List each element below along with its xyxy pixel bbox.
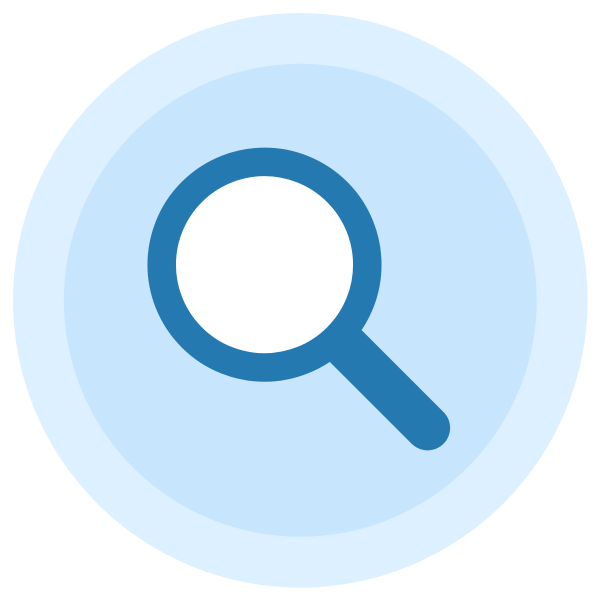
icon: magnifying glass xyxy=(162,162,428,428)
inner circle xyxy=(64,64,537,537)
lens xyxy=(162,162,367,368)
handle xyxy=(345,345,428,428)
